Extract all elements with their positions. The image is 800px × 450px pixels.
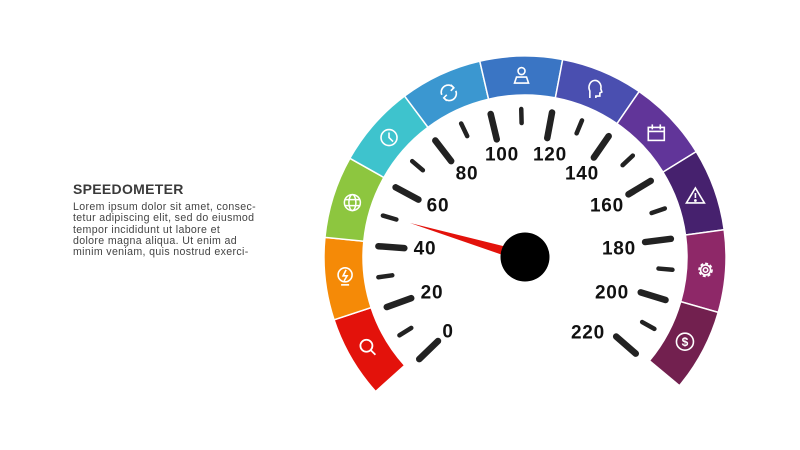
tick labels: 60 — [427, 196, 449, 216]
tick labels: 180 — [602, 238, 636, 260]
tick labels: 40 — [414, 238, 436, 260]
tick labels: 0 — [442, 322, 454, 342]
tick labels: 140 — [565, 164, 599, 184]
segment: dollar (plum): $ — [682, 335, 689, 349]
tick labels: 80 — [456, 164, 478, 184]
segment: user (royal blue) — [480, 55, 563, 99]
segment: refresh (blue) — [403, 57, 496, 131]
tick marks — [378, 109, 672, 359]
title: SPEEDOMETER — [73, 181, 184, 197]
text block: minim veniam, quis nostrud exerci- — [73, 246, 249, 258]
segment: globe (green) — [321, 157, 386, 249]
text block — [73, 201, 256, 258]
tick labels: 200 — [595, 282, 629, 304]
text block: tempor incididunt ut labore et — [73, 224, 220, 236]
segment: warning (dark purple) — [660, 150, 728, 243]
segment: clock (teal) — [347, 93, 433, 184]
segment: head (indigo) — [548, 56, 641, 127]
needle — [410, 223, 527, 262]
segment: search (red) — [330, 301, 409, 394]
tick labels: 220 — [571, 322, 605, 344]
hub — [500, 232, 550, 282]
text block: Lorem ipsum dolor sit amet, consec- — [73, 201, 256, 213]
tick labels: 160 — [590, 196, 624, 216]
text block: dolore magna aliqua. Ut enim ad — [73, 235, 237, 247]
segment: bulb (orange) — [321, 233, 372, 320]
tick labels — [414, 144, 636, 344]
text block: tetur adipiscing elit, sed do eiusmod — [73, 212, 254, 224]
segment: dollar (plum) — [646, 295, 722, 388]
tick labels: 100 — [485, 144, 519, 166]
segment: gear (magenta) — [680, 227, 728, 313]
tick labels: 20 — [421, 282, 443, 304]
segment: calendar (purple) — [611, 89, 699, 178]
tick labels: 120 — [533, 144, 567, 166]
